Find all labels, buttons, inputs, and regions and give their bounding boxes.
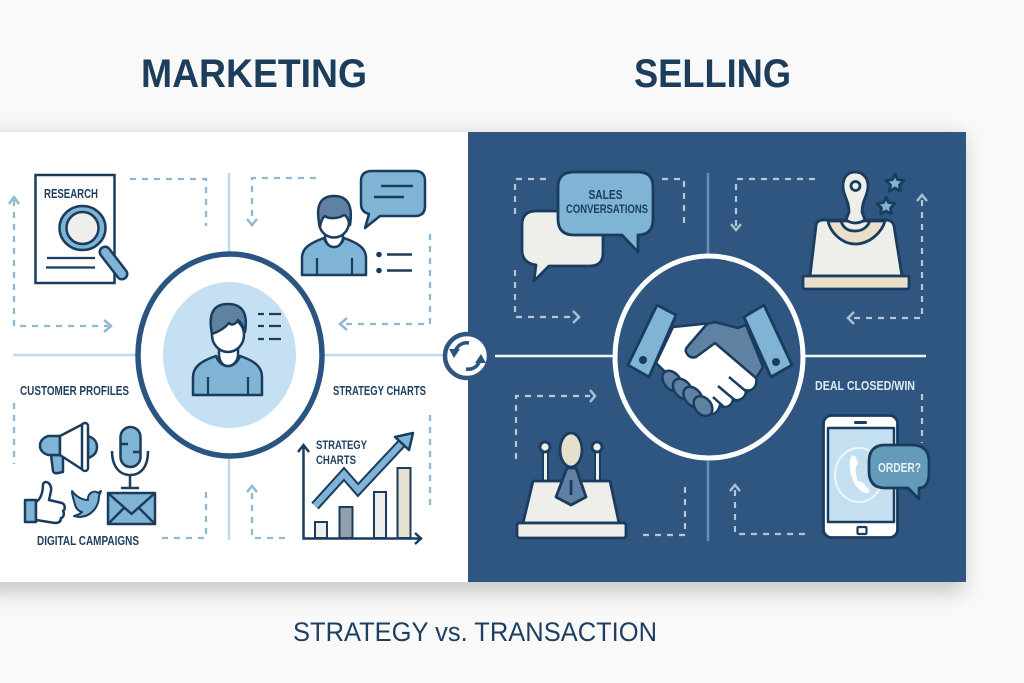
icon: exchange arrows badge [445,334,489,378]
title: marketing: MARKETING [141,52,367,96]
label: customer profiles: CUSTOMER PROFILES [20,384,129,398]
title: selling: SELLING [634,52,791,96]
hub: handshake circle [615,256,803,458]
icon: envelope [108,493,155,524]
hub: customer circle [138,254,322,456]
label: strategy charts: STRATEGY CHARTS [333,384,426,398]
label: digital campaigns: DIGITAL CAMPAIGNS [37,534,139,548]
panel: selling [468,132,966,582]
icon: bird [72,491,101,517]
icon: stamp with stars [803,172,909,289]
icon: podium with speaker [517,433,626,538]
label: order: ORDER? [878,461,921,475]
chart: strategy growth [298,433,421,544]
label: sales: SALES [588,188,622,202]
icon: thumbs up [25,482,65,523]
icon: megaphone [40,423,97,473]
icon: phone with order bubble [824,416,929,538]
icon: research document [36,175,122,283]
label: chart title line two: CHARTS [316,453,356,467]
panel: marketing [0,132,468,582]
label: chart title: STRATEGY [316,438,367,452]
icon: sales conversation bubbles [522,172,653,281]
caption: STRATEGY vs. TRANSACTION [293,617,657,647]
label: conversations: CONVERSATIONS [566,202,648,216]
label: deal closed: DEAL CLOSED/WIN [815,379,915,393]
icon: person with speech bubble [302,171,425,275]
icon: microphone [112,427,148,488]
label: research: RESEARCH [44,187,98,201]
